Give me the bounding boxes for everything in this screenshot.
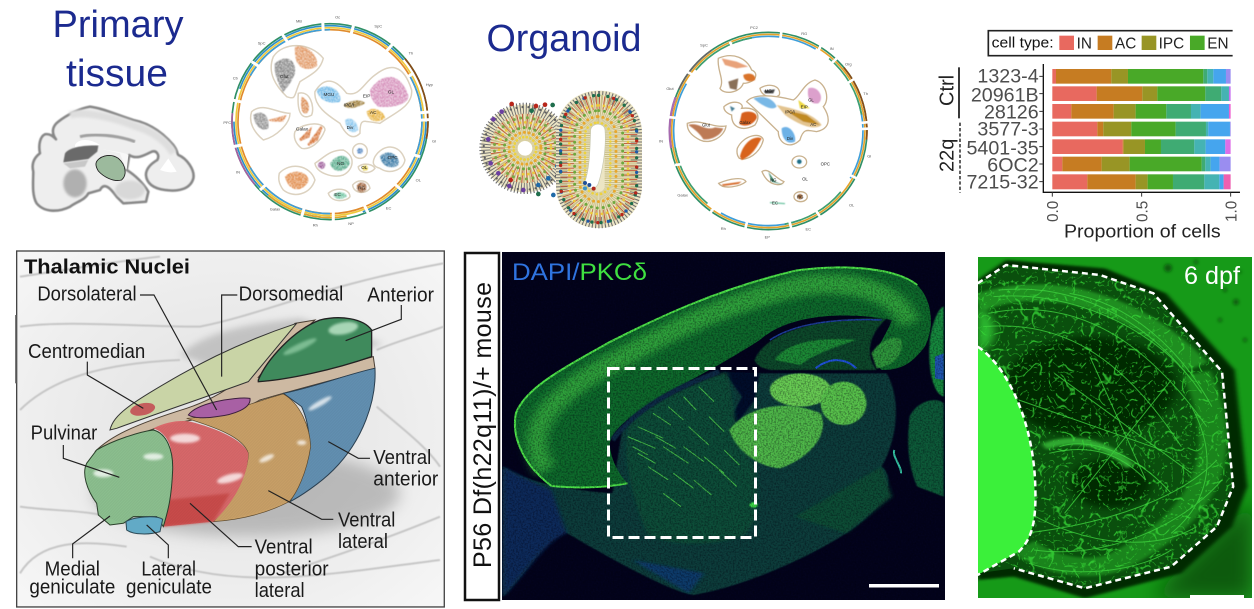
labels: nuclei names: Centromedian [28, 341, 145, 363]
chart: organoid circular UMAP [659, 25, 873, 239]
labels: nuclei names [28, 284, 439, 602]
labels: nuclei names: Dorsomedial [239, 284, 343, 306]
region: ventricle [727, 372, 760, 422]
label: organoid cluster names: Glut [702, 123, 711, 128]
nucleus: anterior [258, 318, 372, 382]
labels: organoid ring regions: PC2 [750, 25, 759, 30]
legend: cell type: cell type: [992, 35, 1054, 51]
labels: primary ring regions: IN [236, 169, 240, 174]
leader lines [63, 295, 401, 558]
labels: nuclei names: geniculate [126, 576, 212, 598]
panel: zebrafish 6 dpf axons [978, 257, 1252, 598]
labels: organoid ring regions: Galax [677, 193, 688, 198]
label: P56 mouse genotype [465, 253, 499, 600]
label: primary cluster names: EIP [363, 94, 370, 99]
label: primary cluster names: AC [370, 110, 377, 115]
labels: organoid ring regions: OL [849, 203, 855, 208]
labels: primary ring regions: Cb [233, 75, 239, 80]
label: organoid cluster names: MG [765, 88, 772, 93]
nucleus: tan band [95, 320, 375, 452]
legend: cell type: IPC [1159, 36, 1184, 53]
label: primary cluster names: GL [388, 89, 394, 94]
region: cerebellar lobes at right [908, 400, 944, 497]
title: Organoid: Organoid [486, 18, 642, 60]
labels: organoid ring regions: Rh [721, 226, 726, 231]
labels: sample names: 5401-35 [967, 137, 1039, 159]
labels: nuclei names: Pulvinar [31, 422, 98, 444]
scale bar: zebrafish [1190, 595, 1244, 598]
labels: sample names: 6OC2 [987, 155, 1039, 177]
region: cortex [515, 267, 931, 487]
labels: sample names [967, 65, 1039, 193]
legend: cell type: IN [1077, 36, 1092, 53]
labels: organoid ring regions [659, 25, 871, 239]
label: primary cluster names: RG [358, 185, 366, 190]
labels: x axis ticks: 1.0 [1223, 201, 1240, 222]
region: bright tectal cell bodies [978, 347, 1035, 575]
labels: sample names: 20961B [971, 84, 1039, 106]
label: P56 mouse genotype: P56 Df(h22q11)/+ mouse [469, 282, 497, 568]
labels: x axis ticks [1045, 201, 1240, 222]
legend: cell type [988, 31, 1233, 56]
texture: tissue grain [502, 252, 945, 600]
labels: organoid ring regions: Gl [867, 154, 871, 159]
label: primary cluster names: OL [361, 165, 368, 170]
ring: primary sample tracks [232, 17, 433, 225]
label: primary cluster names: Div [347, 125, 354, 130]
texture: nuclei striations [87, 368, 375, 527]
nucleus: centromedian [129, 401, 156, 418]
clusters: organoid UMAP blobs [687, 56, 828, 202]
label: organoid cluster names: AC [810, 122, 816, 127]
title: Primary tissue [52, 4, 184, 95]
labels: primary ring regions: PFC [223, 120, 231, 125]
labels: organoid ring regions: Org [845, 62, 852, 67]
nucleus: ventral anterior [283, 368, 375, 502]
labels: primary ring regions [223, 14, 436, 228]
labels: nuclei names: lateral [338, 531, 388, 553]
clusters: primary UMAP blobs [251, 46, 412, 201]
chart: stacked bars of cell type proportions [936, 31, 1240, 241]
background: brain folds [20, 257, 443, 578]
labels: primary ring regions: MB [296, 19, 302, 24]
labels: primary ring regions: Gl [432, 139, 436, 144]
labels: nuclei names: Ventral [338, 510, 395, 532]
fibres: neurites [978, 265, 1233, 588]
bars: seven samples [1052, 69, 1231, 189]
label: organoid cluster names: Galax [739, 120, 751, 125]
labels: primary ring regions: Rh [313, 223, 318, 228]
labels: organoid ring regions: SpC [700, 43, 708, 48]
legend: cell type: AC [1115, 36, 1136, 53]
label: organoid cluster names: RG [797, 194, 804, 199]
labels: 22q group [936, 123, 960, 193]
nucleus: pulvinar [85, 430, 173, 527]
nucleus: ventral posterior lateral [153, 421, 248, 527]
label: primary cluster names: NG [337, 161, 345, 166]
labels: primary ring regions: Hyp [426, 82, 434, 87]
label: primary cluster names: EC [334, 192, 342, 197]
label: primary cluster names: IPC/I [344, 103, 354, 108]
fibres: striatal bundles [628, 387, 739, 507]
nucleus: lateral geniculate [126, 517, 163, 534]
labels: nuclei names: Ventral [255, 537, 313, 559]
labels: x axis ticks: 0.0 [1045, 201, 1062, 222]
outline: neuropil dashed [978, 265, 1233, 588]
label: 6 dpf: 6 dpf [1184, 262, 1240, 290]
label: organoid cluster names: GL [808, 98, 814, 103]
labels: sample names: 1323-4 [977, 65, 1039, 87]
label: primary cluster names [280, 74, 398, 197]
labels: sample names: 7215-32 [967, 171, 1039, 193]
rosette: left [481, 104, 569, 192]
highlight: dashed box on striatum [608, 368, 756, 538]
icon: primary tissue brain section [33, 107, 194, 211]
nucleus: dorsolateral purple [188, 398, 250, 418]
labels: primary ring regions: EC [386, 205, 392, 210]
labels: nuclei names: Medial [45, 559, 100, 581]
labels: nuclei names: anterior [373, 468, 439, 490]
labels: organoid ring regions: Th [863, 91, 868, 96]
panel: thalamic nuclei [16, 251, 444, 607]
title: Primary tissue: tissue [66, 53, 168, 95]
region: hippocampus [755, 318, 887, 370]
icon: organoid rosette illustration [481, 91, 642, 228]
region: brainstem and thalamus [503, 373, 896, 597]
nucleus: ventral lateral [187, 394, 311, 522]
rosette: right [556, 91, 642, 228]
scale bar: mouse [869, 584, 939, 588]
highlights [93, 394, 333, 486]
label: primary cluster names: MGU [324, 92, 334, 97]
labels: 22q group: 22q [936, 139, 958, 172]
label: organoid cluster names: NG [770, 178, 777, 183]
cells: outer left rim [486, 102, 561, 197]
label: organoid cluster names: Div [787, 136, 794, 141]
labels: sample names: 28126 [984, 101, 1039, 123]
legend: cell type: EN [1207, 36, 1229, 53]
region: dark moat [978, 260, 1247, 598]
label: primary cluster names: Glut [280, 74, 289, 79]
region: neuropil interior [978, 265, 1233, 588]
labels: primary ring regions: SpC [374, 24, 382, 29]
label: primary cluster names: OPC [388, 155, 398, 160]
labels: nuclei names: geniculate [29, 576, 115, 598]
label: DAPI / PKCδ: DAPI/PKCδ [512, 259, 647, 286]
heading: Thalamic Nuclei: Thalamic Nuclei [24, 255, 190, 278]
labels: Ctrl group: Ctrl [936, 75, 958, 106]
labels: sample names: 3577-3 [977, 118, 1039, 140]
label: organoid cluster names: OL [802, 176, 808, 181]
labels: organoid ring regions: IN [659, 139, 663, 144]
labels: Ctrl group [936, 67, 959, 118]
labels: nuclei names: Anterior [367, 284, 434, 306]
region: striatum [626, 372, 758, 544]
labels: organoid ring regions: EP [765, 234, 770, 239]
label: organoid cluster names [702, 88, 830, 205]
labels: organoid ring regions: RG [801, 31, 807, 36]
labels: nuclei names: Dorsolateral [37, 284, 137, 306]
label: organoid cluster names: EIP [801, 104, 808, 109]
label: organoid cluster names: OPC [821, 162, 830, 167]
chart: primary tissue circular UMAP [223, 14, 436, 228]
title: Primary tissue: Primary [52, 4, 184, 46]
label: x axis title: Proportion of cells [1064, 220, 1221, 241]
labels: nuclei names: posterior [255, 558, 329, 580]
labels: primary ring regions: Galax [270, 207, 280, 212]
labels: primary ring regions: Oc [335, 14, 340, 19]
axes [1039, 64, 1240, 197]
label: organoid cluster names: EC [772, 200, 778, 205]
texture: dark spots outside neuropil [1164, 260, 1247, 342]
labels: primary ring regions: NP [348, 221, 354, 226]
label: primary cluster names: Galax [296, 127, 309, 132]
labels: organoid ring regions: Glut [666, 86, 675, 91]
labels: primary ring regions: OL [416, 178, 422, 183]
panel: mouse brain section [502, 252, 945, 600]
labels: primary ring regions: Th [409, 50, 413, 55]
labels: nuclei names: Ventral [373, 447, 431, 469]
region: thalamic nuclei bright [770, 373, 831, 407]
labels: organoid ring regions: IN [830, 46, 834, 51]
labels: nuclei names: lateral [255, 580, 305, 602]
labels: organoid ring regions: EC [806, 227, 811, 232]
labels: nuclei names: Lateral [141, 559, 196, 581]
nucleus: dorsomedial [110, 323, 297, 430]
label: organoid cluster names: IPC/I [785, 109, 795, 114]
labels: x axis ticks: 0.5 [1134, 201, 1151, 222]
labels: primary ring regions: SpC [258, 40, 266, 45]
ring: organoid sample tracks [663, 30, 873, 230]
